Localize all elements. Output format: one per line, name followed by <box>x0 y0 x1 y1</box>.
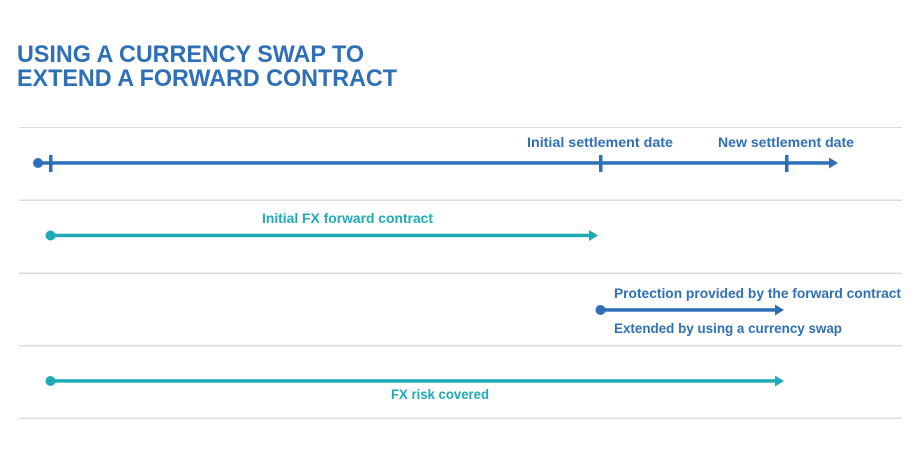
label: new settlement date: New settlement date <box>718 135 855 150</box>
title <box>17 41 397 92</box>
arrow: initial FX forward contract <box>46 230 598 241</box>
label: extended by swap: Extended by using a currency swap <box>614 321 842 336</box>
label: protection provided: Protection provided by the forward contract <box>614 286 902 301</box>
label: initial FX forward contract: Initial FX forward contract <box>262 211 434 226</box>
arrow: extension by swap <box>596 304 784 316</box>
title: USING A CURRENCY SWAP TO <box>17 41 364 68</box>
label: FX risk covered: FX risk covered <box>391 387 489 402</box>
arrow: FX risk covered <box>46 376 784 386</box>
main timeline arrow <box>33 155 838 172</box>
label: initial settlement date: Initial settlement date <box>527 135 674 150</box>
title: EXTEND A FORWARD CONTRACT <box>17 65 397 92</box>
